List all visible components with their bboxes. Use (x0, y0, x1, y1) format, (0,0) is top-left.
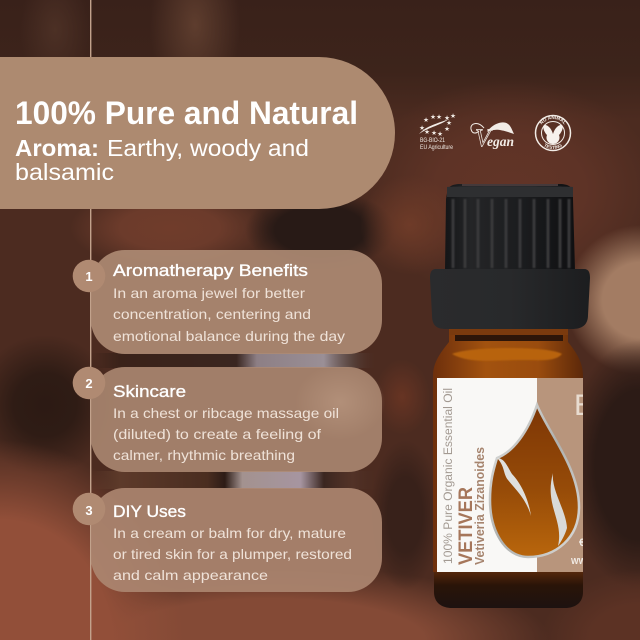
icon: amber drop (490, 405, 579, 557)
icon: EU organic logo: ★ (423, 116, 429, 124)
panel: headline (0, 57, 395, 209)
icon: EU organic logo: ★ (444, 125, 450, 133)
bottle cap: collar (430, 269, 590, 329)
icon: Vegan logo: egan (487, 134, 514, 149)
icon: EU organic logo: ★ (430, 113, 436, 121)
icon: EU organic logo: ★ (436, 113, 442, 121)
icon: Vegan logo: V (475, 125, 493, 152)
icon: EU organic logo: ★ (437, 130, 443, 138)
label: tan panel: E (574, 389, 594, 422)
label text: product name (443, 388, 487, 565)
bottle base (434, 570, 583, 608)
icon: no animal testing seal (534, 114, 572, 152)
icon: EU organic logo: ★ (450, 112, 456, 120)
vertical timeline line (90, 0, 91, 640)
text: DIY description: In a cream or balm for dry, mature (113, 525, 346, 541)
text: aroma description: Aroma: (15, 135, 99, 161)
label text: product name: VETIVER (456, 487, 477, 565)
badge 3: 3 (85, 503, 93, 518)
icon: EU organic logo: BG-BIO-21 (420, 138, 446, 144)
icon: EU organic logo: ★ (419, 124, 425, 132)
icon: EU organic logo: ★ (444, 114, 450, 122)
icon: Vegan logo (471, 122, 514, 152)
card 2: skincare (73, 367, 382, 472)
badge 2: 2 (85, 376, 93, 391)
icon: EU organic logo: ★ (431, 129, 437, 137)
text: skincare description: In a chest or ribcage massage oil (113, 405, 339, 421)
text: aroma description: balsamic (15, 159, 114, 185)
badge 1 (73, 260, 105, 292)
text: aromatherapy description: concentration, centering and (113, 306, 311, 322)
neck shadow (449, 329, 568, 335)
text: aromatherapy description: In an aroma jewel for better (113, 285, 305, 301)
text: skincare description: (diluted) to create a feeling of (113, 426, 321, 442)
badge 1: 1 (85, 269, 93, 284)
icon: EU organic logo: ★ (424, 128, 430, 136)
product: vetiver essential oil bottle (430, 184, 594, 608)
label: white panel (437, 378, 537, 572)
card 3: DIY uses (73, 488, 382, 592)
bottle cap: ribbed top (445, 184, 575, 270)
heading: aromatherapy benefits: Aromatherapy Benefits (113, 261, 308, 280)
heading: skincare: Skincare (113, 382, 186, 401)
icon: EU organic logo (419, 112, 456, 151)
text: DIY description: or tired skin for a plumper, restored (113, 546, 352, 562)
heading: 100% Pure and Natural: 100% Pure and Natural (15, 95, 358, 131)
heading: DIY uses: DIY Uses (113, 502, 186, 521)
text: DIY description: and calm appearance (113, 567, 268, 583)
glass highlight (452, 348, 562, 361)
label: tan panel (537, 378, 583, 572)
card 1: aromatherapy benefits (73, 250, 382, 354)
label: tan panel: € (579, 537, 585, 549)
text: skincare description: calmer, rhythmic breathing (113, 447, 295, 463)
label text: product name: 100% Pure Organic Essential Oil (443, 388, 455, 564)
text: aroma description: Earthy, woody and (107, 135, 309, 161)
icon: EU organic logo: EU Agriculture (420, 145, 454, 151)
bottle glass (433, 329, 583, 572)
icon: EU organic logo: ★ (446, 119, 452, 127)
label: tan panel: WWW (571, 557, 594, 566)
text: aromatherapy description: emotional balance during the day (113, 328, 345, 344)
icon: no animal testing seal: TESTING (544, 143, 562, 149)
label text: product name: Vetiveria Zizanoides (473, 447, 487, 565)
badge 2 (73, 367, 105, 399)
icon: no animal testing seal: NO ANIMAL (540, 116, 565, 124)
badge 3 (73, 493, 105, 525)
